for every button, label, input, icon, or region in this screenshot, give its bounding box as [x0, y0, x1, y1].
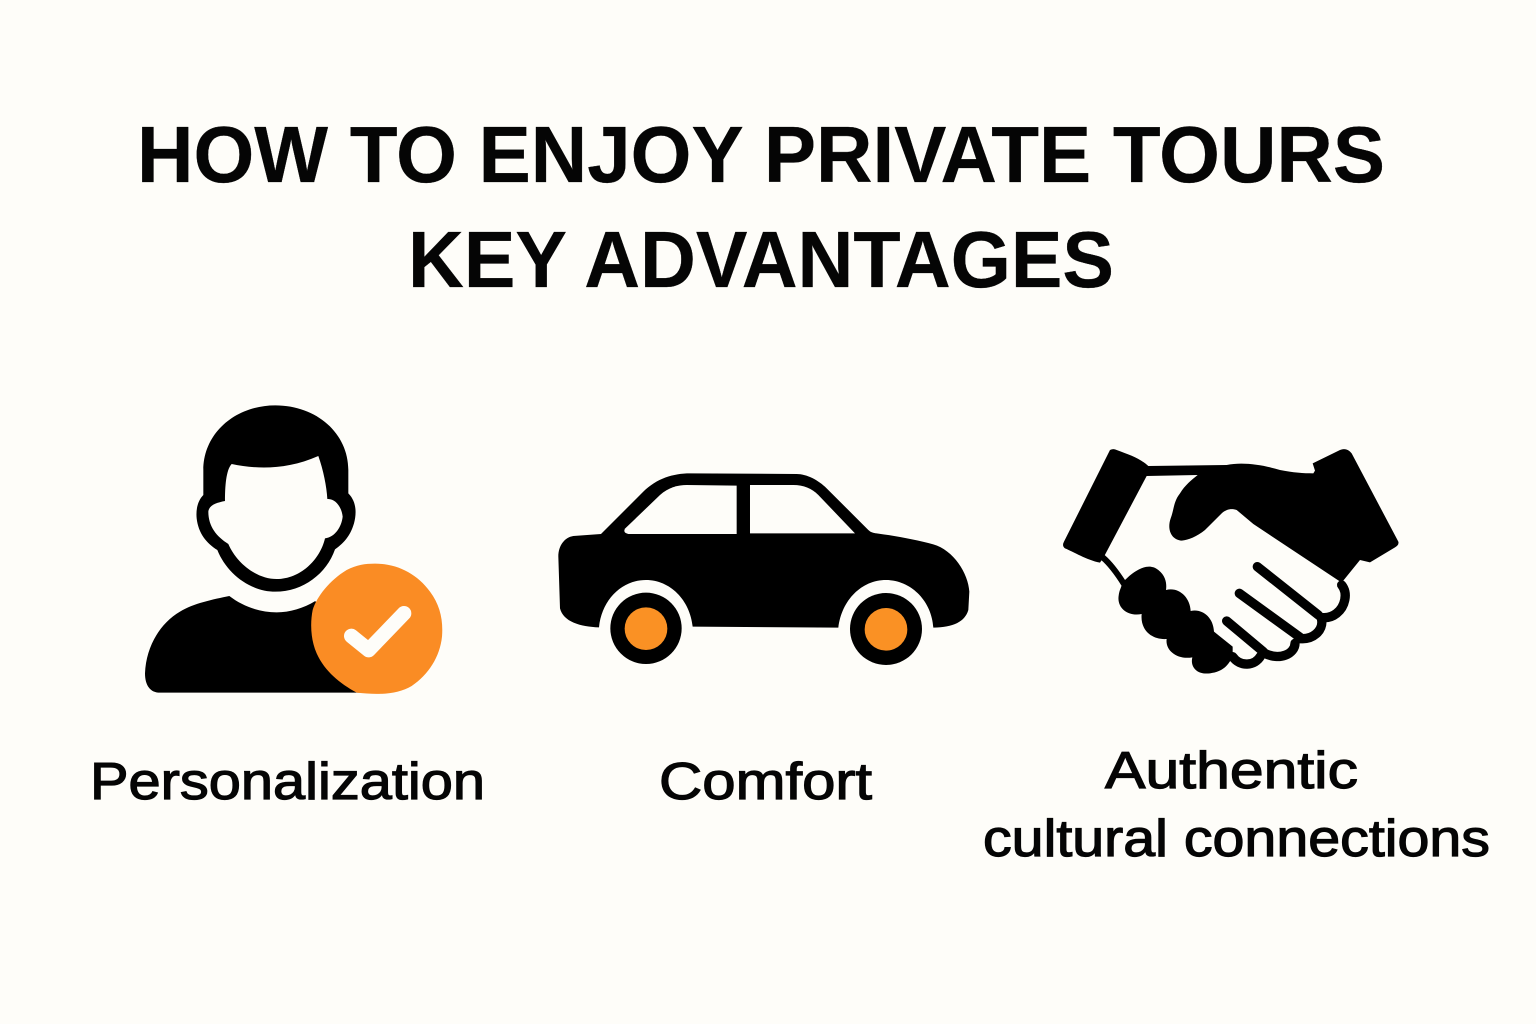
label: Authentic cultural connections: cultural connections	[983, 810, 1490, 868]
title: HOW TO ENJOY PRIVATE TOURS	[137, 110, 1385, 199]
icon: car	[558, 473, 969, 665]
title	[137, 110, 1385, 304]
label: Comfort: Comfort	[659, 753, 873, 811]
label: Personalization: Personalization	[90, 753, 485, 811]
label: Authentic cultural connections: Authentic	[1105, 742, 1358, 800]
icon: person with check badge	[145, 405, 442, 694]
icon: handshake	[1063, 449, 1399, 674]
title: KEY ADVANTAGES	[408, 215, 1114, 304]
label: Authentic cultural connections	[983, 742, 1490, 868]
